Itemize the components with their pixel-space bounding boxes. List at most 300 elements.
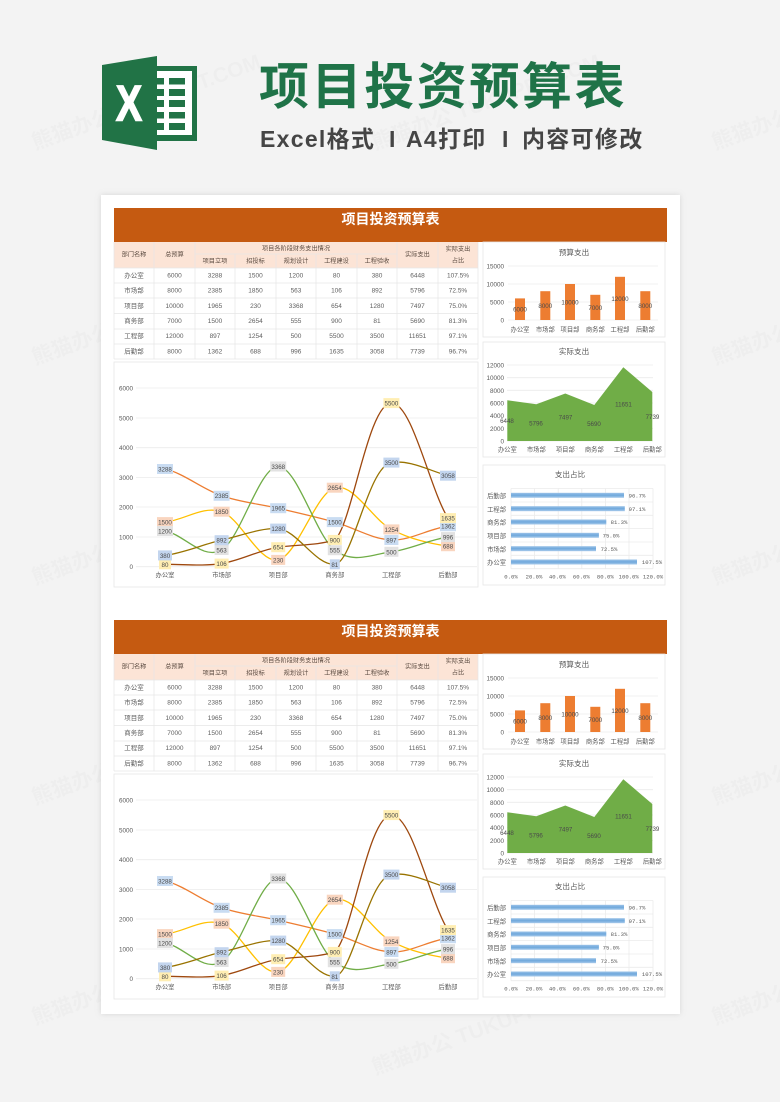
budget table: 项目部 [124, 713, 144, 722]
watermark: 熊猫办公 TUKUPPT.COM [29, 925, 264, 1030]
horizontal bar chart: spending ratio: 60.0% [573, 986, 590, 992]
horizontal bar chart: spending ratio: 20.0% [526, 574, 543, 580]
budget table: 实际支出 [446, 657, 470, 665]
budget table: 项目各阶段财务支出情况 [262, 656, 330, 664]
horizontal bar chart: spending ratio: 办公室 [487, 558, 506, 567]
budget table: 563 [291, 288, 302, 294]
data labels: 项目立项: 3288 [158, 878, 172, 885]
area chart: actual spending: 5796 [529, 832, 543, 840]
budget table: 654 [331, 303, 342, 310]
data labels: 项目立项: 897 [386, 538, 397, 544]
subtitle: 内容可修改 [522, 126, 644, 152]
bar chart: budget: 办公室 [511, 736, 529, 746]
budget table: 3500 [370, 745, 385, 752]
subtitle: I [502, 126, 510, 152]
data labels: 工程验收: 892 [216, 950, 227, 957]
budget table: 5796 [410, 288, 425, 294]
budget table [114, 654, 478, 771]
budget table: 1280 [370, 715, 385, 722]
budget table: 3288 [208, 684, 223, 692]
bar chart: budget: 5000 [490, 712, 504, 718]
budget table: 工程建设 [324, 257, 349, 265]
budget table: 7000 [167, 318, 182, 325]
data labels: 项目立项: 2385 [215, 493, 229, 500]
data labels: 规划设计: 563 [216, 547, 227, 554]
panel: report 1 [114, 208, 667, 587]
bar chart: budget: 项目部 [561, 324, 579, 334]
subtitle: Excel格式 [260, 126, 375, 152]
budget table: 8000 [167, 348, 182, 356]
budget table: 1280 [370, 303, 385, 310]
budget table: 5500 [329, 745, 344, 752]
data labels: 工程建设: 80 [162, 974, 169, 981]
horizontal bar chart: spending ratio: 工程部 [487, 916, 506, 925]
bar chart: budget: 预算支出 [559, 247, 589, 257]
horizontal bar chart: spending ratio: 81.3% [611, 931, 628, 938]
line chart: stage spending by department: 4000 [119, 857, 133, 864]
area chart: actual spending: 后勤部 [643, 856, 662, 866]
data labels: 工程建设 [159, 398, 456, 569]
bar chart: budget: 10000 [486, 282, 504, 288]
line chart: stage spending by department: 商务部 [325, 570, 344, 579]
data labels: 项目立项: 897 [386, 950, 397, 956]
budget table: 688 [250, 348, 261, 356]
budget table: 81 [373, 730, 381, 737]
data labels: 规划设计 [157, 462, 455, 557]
data labels: 招投标: 230 [273, 969, 284, 976]
data labels: 工程验收: 380 [160, 965, 171, 972]
budget table: 1500 [248, 272, 263, 280]
line chart: stage spending by department: 后勤部 [439, 982, 457, 991]
line chart: stage spending by department: 市场部 [212, 570, 231, 579]
line chart: stage spending by department: 6000 [119, 386, 133, 392]
budget table: 81.3% [449, 318, 467, 325]
budget table: 1254 [248, 333, 263, 340]
data labels: 工程验收: 380 [160, 553, 171, 560]
budget table: 8000 [167, 288, 182, 294]
budget table: 2654 [248, 318, 263, 325]
budget table: 12000 [165, 333, 184, 340]
budget table: 7739 [410, 348, 425, 356]
budget table: 5690 [410, 318, 425, 325]
bar chart: budget [483, 654, 665, 749]
data labels: 规划设计: 500 [386, 549, 397, 556]
horizontal bar chart: spending ratio: 120.0% [643, 986, 664, 992]
line chart: stage spending by department: 5000 [119, 416, 133, 422]
bar chart: budget: 10000 [561, 712, 579, 718]
bar chart: budget: 8000 [538, 303, 553, 310]
budget table: 占比 [452, 256, 464, 264]
budget table: 897 [210, 745, 221, 752]
watermark: 熊猫办公 TUKUPPT.COM [29, 50, 264, 155]
data labels: 规划设计: 555 [330, 960, 341, 967]
data labels: 项目立项: 3288 [158, 466, 172, 473]
area chart: actual spending: 工程部 [614, 444, 633, 454]
data labels: 招投标: 1850 [215, 509, 229, 516]
budget table: 1500 [208, 318, 223, 325]
budget table: 2385 [208, 288, 223, 294]
line chart: stage spending by department: 后勤部 [439, 570, 457, 579]
area chart: actual spending: 项目部 [556, 856, 575, 866]
area chart: actual spending: 7739 [646, 414, 660, 421]
bar chart: budget: 10000 [561, 300, 579, 306]
area chart: actual spending: 5690 [587, 421, 601, 428]
horizontal bar chart: spending ratio: 20.0% [526, 986, 543, 992]
area chart: actual spending: 商务部 [585, 856, 604, 866]
data labels: 规划设计: 3368 [271, 876, 286, 883]
budget table: 办公室 [124, 270, 144, 280]
budget table: 6448 [410, 684, 425, 692]
line chart: stage spending by department: 4000 [119, 445, 133, 452]
horizontal bar chart: spending ratio: 市场部 [487, 544, 506, 553]
line chart: stage spending by department: 办公室 [156, 570, 174, 579]
area chart: actual spending: 工程部 [614, 856, 633, 866]
bar chart: budget: 预算支出 [559, 659, 589, 669]
budget table: 1850 [248, 288, 263, 294]
budget table: 6448 [410, 272, 425, 280]
area chart: actual spending: 6000 [490, 400, 504, 408]
area chart: actual spending: 办公室 [498, 856, 517, 866]
line chart: stage spending by department: 0 [129, 976, 133, 983]
budget table: 80 [333, 272, 340, 280]
budget table: 1635 [329, 348, 344, 356]
budget table: 3500 [370, 333, 385, 340]
budget table: 6000 [167, 272, 182, 280]
bar chart: budget: 6000 [513, 718, 527, 726]
budget table: 工程验收 [365, 669, 389, 677]
area chart: actual spending: 8000 [490, 388, 504, 395]
horizontal bar chart: spending ratio: 80.0% [597, 986, 614, 992]
line chart: stage spending by department: 商务部 [325, 982, 344, 991]
budget table: 380 [372, 272, 383, 280]
data labels: 工程验收: 3058 [441, 885, 455, 892]
data labels: 规划设计: 996 [443, 947, 454, 954]
budget table: 11651 [409, 745, 427, 752]
area chart: actual spending: 6448 [500, 830, 514, 837]
budget table: 1635 [329, 760, 344, 768]
area chart: actual spending: 0 [500, 438, 504, 446]
report banner [114, 620, 667, 654]
line chart: stage spending by department: 2000 [119, 916, 133, 924]
horizontal bar chart: spending ratio: 107.5% [642, 559, 663, 566]
horizontal bar chart: spending ratio: 商务部 [487, 930, 506, 939]
data labels: 工程验收 [158, 870, 456, 981]
horizontal bar chart: spending ratio: 120.0% [643, 574, 664, 580]
data labels: 工程建设: 5500 [385, 401, 399, 408]
line chart: stage spending by department: 1000 [119, 946, 133, 954]
budget table: 规划设计 [284, 257, 308, 265]
horizontal bar chart: spending ratio [483, 877, 665, 997]
budget table: 1500 [208, 730, 223, 737]
area chart: actual spending: 实际支出 [559, 758, 589, 768]
budget table: 5796 [410, 700, 425, 706]
data labels: 项目立项: 1362 [441, 524, 455, 531]
horizontal bar chart: spending ratio: 97.1% [629, 918, 646, 925]
bar chart: budget: 6000 [513, 306, 527, 314]
data labels: 招投标: 688 [443, 956, 454, 963]
bar chart: budget: 7000 [588, 717, 603, 724]
budget table: 部门名称 [122, 250, 146, 258]
budget table: 900 [331, 730, 342, 737]
area chart: actual spending: 7739 [646, 826, 660, 833]
area chart: actual spending: 2000 [490, 838, 504, 845]
bar chart: budget: 8000 [538, 715, 553, 722]
budget table: 11651 [409, 333, 427, 340]
budget table: 8000 [167, 760, 182, 768]
bar chart: budget: 12000 [611, 708, 629, 715]
budget table: 7497 [410, 303, 425, 310]
bar chart: budget: 5000 [490, 300, 504, 306]
budget table: 8000 [167, 700, 182, 706]
paper sheet [101, 195, 680, 1014]
area chart: actual spending: 实际支出 [559, 346, 589, 356]
bar chart: budget: 8000 [638, 715, 653, 722]
budget table: 107.5% [447, 684, 469, 692]
budget table: 招投标 [246, 257, 265, 265]
budget table: 7739 [410, 760, 425, 768]
bar chart: budget: 项目部 [561, 736, 579, 746]
area chart: actual spending: 6448 [500, 418, 514, 425]
budget table: 555 [291, 730, 302, 737]
bar chart: budget: 市场部 [536, 324, 555, 334]
budget table: 106 [331, 288, 342, 294]
line chart: stage spending by department: 0 [129, 564, 133, 571]
panel: report 2 [114, 620, 667, 999]
area chart: actual spending: 2000 [490, 426, 504, 433]
budget table: 1362 [208, 760, 223, 768]
data labels: 规划设计: 500 [386, 961, 397, 968]
data labels: 工程验收: 81 [331, 974, 339, 981]
line chart: stage spending by department [114, 774, 478, 999]
area chart: actual spending: 4000 [490, 825, 504, 832]
main title: 项目投资预算表 [259, 59, 627, 115]
budget table: 实际支出 [405, 662, 430, 670]
watermark: 熊猫办公 TUKUPPT.COM [29, 705, 264, 810]
budget table [114, 242, 478, 359]
budget table: 项目各阶段财务支出情况 [262, 244, 330, 252]
horizontal bar chart: spending ratio: 后勤部 [487, 903, 506, 912]
budget table: 市场部 [124, 698, 144, 706]
bar chart: budget: 10000 [486, 694, 504, 700]
area chart: actual spending: 市场部 [527, 856, 546, 866]
budget table: 688 [250, 760, 261, 768]
line chart: stage spending by department: 3000 [119, 887, 133, 894]
data labels: 工程建设 [159, 810, 456, 981]
data labels: 项目立项 [157, 876, 456, 957]
horizontal bar chart: spending ratio: 80.0% [597, 574, 614, 580]
budget table: 3058 [370, 348, 385, 356]
line chart: stage spending by department: 6000 [119, 798, 133, 804]
area chart: actual spending: 12000 [486, 362, 504, 370]
data labels: 招投标 [157, 483, 455, 565]
data labels: 招投标 [157, 895, 455, 977]
horizontal bar chart: spending ratio: 支出占比 [555, 881, 586, 891]
data labels: 工程建设: 1635 [441, 516, 455, 523]
budget table: 80 [333, 684, 340, 692]
budget table: 996 [291, 760, 302, 768]
line chart: stage spending by department: 项目部 [269, 570, 288, 579]
budget table: 900 [331, 318, 342, 325]
budget table: 工程验收 [365, 257, 389, 265]
budget table: 3288 [208, 272, 223, 280]
horizontal bar chart: spending ratio: 75.0% [603, 944, 620, 952]
area chart: actual spending: 市场部 [527, 444, 546, 454]
horizontal bar chart: spending ratio: 商务部 [487, 518, 506, 527]
horizontal bar chart: spending ratio: 后勤部 [487, 491, 506, 500]
horizontal bar chart: spending ratio: 40.0% [549, 574, 566, 580]
budget table: 总预算 [165, 250, 184, 258]
data labels: 项目立项: 2385 [215, 905, 229, 912]
budget table: 996 [291, 348, 302, 356]
area chart: actual spending: 5690 [587, 833, 601, 840]
budget table: 1965 [208, 303, 223, 310]
page shadow [101, 195, 680, 1014]
budget table: 工程部 [124, 743, 144, 752]
horizontal bar chart: spending ratio: 107.5% [642, 971, 663, 978]
budget table: 项目部 [124, 301, 144, 310]
data labels: 招投标: 1500 [158, 520, 172, 527]
data labels: 招投标: 2654 [328, 897, 342, 904]
data labels: 项目立项: 1965 [271, 506, 286, 513]
horizontal bar chart: spending ratio: 100.0% [619, 574, 639, 580]
data labels: 工程建设: 654 [273, 545, 284, 552]
budget table: 1965 [208, 715, 223, 722]
budget table: 1850 [248, 700, 263, 706]
horizontal bar chart: spending ratio: 81.3% [611, 519, 628, 526]
budget table: 10000 [165, 303, 184, 310]
subtitle: A4打印 [406, 126, 487, 152]
area chart: actual spending: 11651 [615, 402, 632, 408]
budget table: 230 [250, 303, 261, 310]
area chart: actual spending: 7497 [559, 414, 573, 422]
budget table: 办公室 [124, 682, 144, 692]
area chart: actual spending: 6000 [490, 812, 504, 820]
line chart: stage spending by department: 2000 [119, 504, 133, 512]
watermark: 熊猫办公 TUKUPPT.COM [369, 975, 604, 1080]
area chart: actual spending: 8000 [490, 800, 504, 807]
bar chart: budget: 后勤部 [636, 736, 655, 746]
watermark: 熊猫办公 TUKUPPT.COM [29, 485, 264, 590]
area chart: actual spending: 商务部 [585, 444, 604, 454]
horizontal bar chart: spending ratio: 60.0% [573, 574, 590, 580]
data labels: 招投标: 1500 [158, 932, 172, 939]
horizontal bar chart: spending ratio: 市场部 [487, 956, 506, 965]
line chart: stage spending by department: 1000 [119, 534, 133, 542]
data labels: 招投标: 2654 [328, 485, 342, 492]
bar chart: budget: 工程部 [611, 736, 629, 746]
budget table: 75.0% [449, 303, 467, 310]
data labels: 招投标: 688 [443, 544, 454, 551]
budget table: 1200 [289, 272, 304, 280]
budget table: 654 [331, 715, 342, 722]
budget table: 72.5% [449, 700, 467, 706]
budget table: 230 [250, 715, 261, 722]
horizontal bar chart: spending ratio: 96.7% [629, 492, 646, 500]
budget table: 500 [291, 745, 302, 752]
budget table: 实际支出 [405, 250, 430, 258]
horizontal bar chart: spending ratio: 0.0% [504, 986, 518, 992]
budget table: 实际支出 [446, 245, 470, 253]
data labels: 招投标: 1254 [385, 939, 399, 946]
horizontal bar chart: spending ratio: 100.0% [619, 986, 639, 992]
data labels: 招投标: 1254 [385, 527, 399, 534]
horizontal bar chart: spending ratio: 72.5% [601, 958, 618, 965]
budget table: 106 [331, 700, 342, 706]
bar chart: budget [483, 242, 665, 337]
horizontal bar chart: spending ratio: 72.5% [601, 546, 618, 553]
bar chart: budget: 市场部 [536, 736, 555, 746]
area chart: actual spending: 11651 [615, 814, 632, 820]
data labels: 工程验收: 892 [216, 538, 227, 545]
horizontal bar chart: spending ratio: 75.0% [603, 532, 620, 540]
budget table: 商务部 [124, 728, 144, 737]
data labels: 规划设计 [157, 874, 455, 969]
budget table: 市场部 [124, 286, 144, 294]
budget table: 3058 [370, 760, 385, 768]
bar chart: budget: 15000 [486, 676, 504, 682]
area chart: actual spending: 5796 [529, 420, 543, 428]
budget table: 2385 [208, 700, 223, 706]
horizontal bar chart: spending ratio: 40.0% [549, 986, 566, 992]
budget table: 工程部 [124, 331, 144, 340]
area chart: actual spending: 项目部 [556, 444, 575, 454]
data labels: 工程验收: 1280 [271, 526, 286, 533]
budget table: 563 [291, 700, 302, 706]
area chart: actual spending [483, 754, 665, 869]
data labels: 规划设计: 3368 [271, 464, 286, 471]
data labels: 工程建设: 900 [330, 537, 341, 544]
watermark: 熊猫办公 TUKUPPT.COM [369, 50, 604, 155]
line chart: stage spending by department: 工程部 [382, 570, 401, 579]
data labels: 工程验收: 3058 [441, 473, 455, 480]
budget table: 规划设计 [284, 669, 308, 677]
budget table: 892 [372, 700, 383, 706]
budget table: 892 [372, 288, 383, 294]
budget table: 97.1% [449, 333, 467, 340]
data labels: 项目立项: 1500 [328, 932, 342, 939]
icon: excel logo [102, 56, 197, 150]
line chart: stage spending by department: 5000 [119, 828, 133, 834]
report banner [114, 208, 667, 242]
budget table: 1362 [208, 348, 223, 356]
data labels: 工程建设: 654 [273, 957, 284, 964]
area chart: actual spending: 7497 [559, 826, 573, 834]
data labels: 项目立项 [157, 464, 456, 545]
budget table: 后勤部 [124, 346, 144, 356]
area chart: actual spending: 12000 [486, 774, 504, 782]
line chart: stage spending by department: 项目部 [269, 982, 288, 991]
budget table: 项目立项 [203, 669, 227, 677]
budget table: 10000 [165, 715, 184, 722]
watermark: 熊猫办公 TUKUPPT.COM [29, 265, 264, 370]
line chart: stage spending by department: 办公室 [156, 982, 174, 991]
budget table: 555 [291, 318, 302, 325]
budget table: 96.7% [449, 348, 467, 356]
data labels: 规划设计: 1200 [158, 940, 172, 948]
line chart: stage spending by department: 市场部 [212, 982, 231, 991]
data labels: 工程建设: 80 [162, 562, 169, 569]
data labels: 招投标: 230 [273, 557, 284, 564]
line chart: stage spending by department: 3000 [119, 475, 133, 482]
budget table: 部门名称 [122, 662, 146, 670]
data labels: 项目立项: 1362 [441, 936, 455, 943]
report banner: 项目投资预算表 [342, 623, 440, 639]
icon: excel logo: X [116, 76, 142, 132]
budget table: 工程建设 [324, 669, 349, 677]
budget table: 招投标 [246, 669, 265, 677]
horizontal bar chart: spending ratio: 办公室 [487, 970, 506, 979]
budget table: 5690 [410, 730, 425, 737]
